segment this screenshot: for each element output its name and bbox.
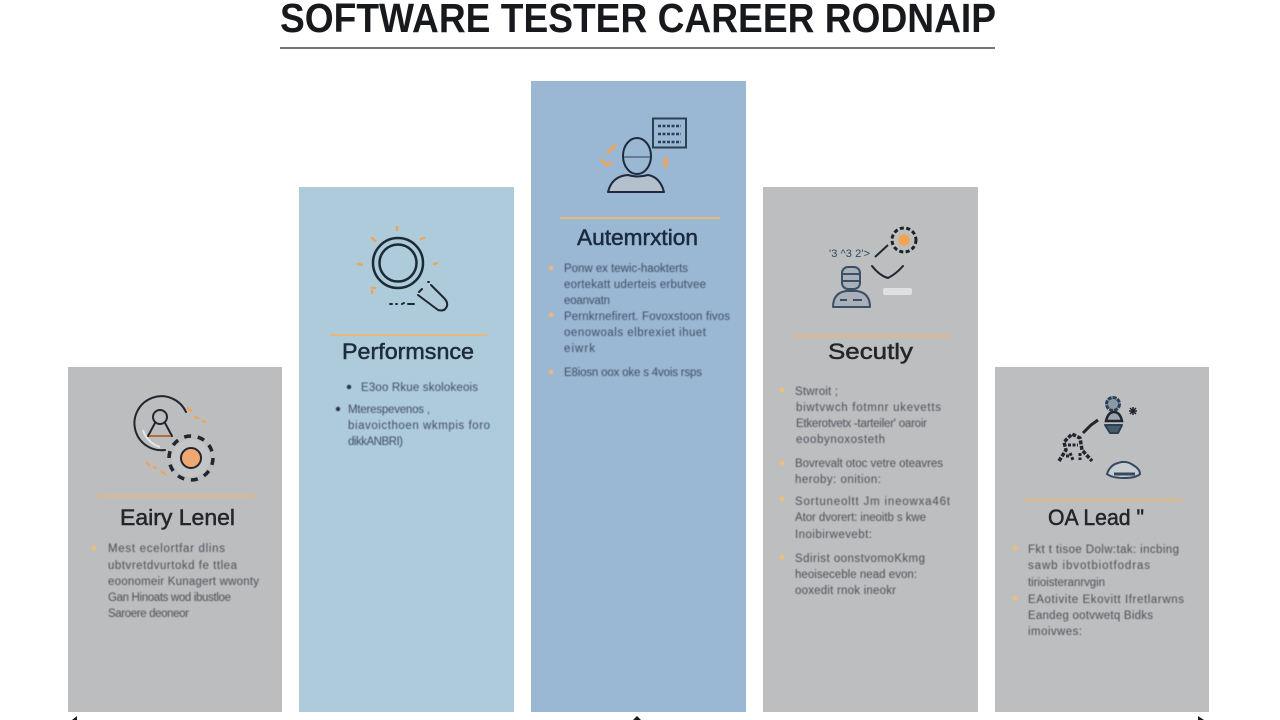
panel: qa lead (995, 367, 1209, 712)
heading: OA Lead " (1048, 505, 1144, 530)
icon: engineer with screen (602, 118, 686, 192)
bullet list: E8iosn oox oke s 4vois rsps (564, 367, 702, 379)
bullet list (1012, 544, 1184, 638)
bullet list: heroby: onition: (795, 474, 881, 486)
bullet list: Saroere deoneor (108, 608, 189, 620)
panel: early level (68, 367, 282, 712)
bullet list: Eandeg ootvwetq Bidks (1028, 610, 1153, 622)
bullet list: Fkt t tisoe Dolw:tak: incbing (1028, 544, 1179, 556)
icon: security specialist (829, 228, 916, 307)
bullet list: Ponw ex tewic-haokterts (564, 263, 688, 275)
bullet list: dikkANBRI) (348, 436, 403, 448)
bullet list: heoiseceble nead evon: (795, 569, 917, 581)
bullet list: Bovrevalt otoc vetre oteavres (795, 458, 943, 470)
bullet list: Sdirist oonstvomoKkmg (795, 553, 925, 565)
bullet list (92, 543, 259, 620)
bullet list: eoobynoxosteth (796, 434, 885, 446)
bullet list: Pernkrnefirert. Fovoxstoon fivos (564, 311, 730, 323)
heading: Secutly (828, 339, 913, 364)
bullet list: E3oo Rkue skolokeois (361, 382, 478, 394)
heading: Autemrxtion (577, 225, 698, 250)
bullet list: tirioisteranrvgin (1028, 577, 1105, 589)
bullet list: Inoibirwevebt: (795, 529, 872, 541)
bullet list: imoivwes: (1028, 626, 1082, 638)
bullet list (780, 386, 951, 597)
divider (560, 217, 720, 219)
bullet list: ubtvretdvurtokd fe ttlea (108, 560, 238, 572)
divider (330, 334, 487, 336)
icon: security specialist: '3 ^3 2'> (829, 248, 870, 260)
bullet list (336, 382, 490, 448)
bullet list: oenowoals elbrexiet ihuet (564, 327, 707, 339)
icon: magnifying glass (358, 227, 447, 310)
divider (1024, 499, 1182, 501)
divider (97, 495, 255, 497)
bullet list: Gan Hinoats wod ibustloe (108, 592, 231, 604)
heading: Performsnce (342, 339, 474, 364)
icon: team lead cluster (1059, 398, 1140, 478)
bullet list: biavoicthoen wkmpis foro (348, 420, 490, 432)
bullet list: Stwroit ; (795, 386, 838, 398)
bullet list (548, 263, 730, 379)
bullet list: eortekatt uderteis erbutvee (564, 279, 706, 291)
panel: automation (531, 81, 746, 712)
bullet list: eoonomeir Kunagert wwonty (108, 576, 259, 588)
bullet list: eoanvatn (564, 295, 610, 307)
icon: person and gear (134, 396, 213, 480)
bullet list: Etkerotvetx -tarteiler' oaroir (796, 418, 927, 430)
arrow markers along bottom edge (72, 716, 1204, 720)
panel: security (763, 187, 978, 712)
bullet list: Ator dvorert: ineoitb s kwe (795, 512, 926, 524)
bullet list: ooxedit rnok ineokr (795, 585, 896, 597)
bullet list: Sortuneoltt Jm ineowxa46t (795, 496, 951, 508)
bullet list: EAotivite Ekovitt Ifretlarwns (1028, 594, 1184, 606)
bullet list: sawb ibvotbiotfodras (1028, 560, 1150, 572)
divider (792, 335, 952, 337)
bullet list: eiwrk (564, 343, 595, 355)
heading: Eairy Lenel (120, 505, 235, 530)
bullet list: Mterespevenos , (348, 404, 430, 416)
bullet list: biwtvwch fotmnr ukevetts (796, 402, 941, 414)
bullet list: Mest ecelortfar dlins (108, 543, 225, 555)
panel: performance (299, 187, 514, 712)
